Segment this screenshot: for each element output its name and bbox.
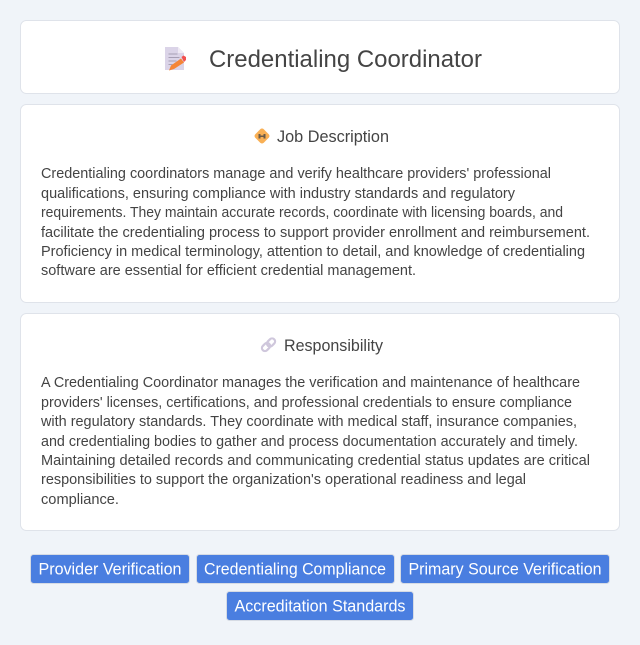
heading: responsibility: Responsibility — [284, 337, 384, 355]
text block: responsibility: compliance. — [41, 492, 119, 508]
panel: job description — [20, 104, 620, 302]
title: Credentialing Coordinator — [209, 46, 482, 73]
text block: job description: facilitate the credentialing process to support provider enrollment and reimbursement. — [41, 225, 590, 241]
text block: job description: requirements. They maintain accurate records, coordinate with licensing boards, and — [41, 205, 563, 221]
text block: responsibility: providers' licenses, certifications, and professional credentials to ensure compliance — [41, 395, 572, 411]
icon: orange diamond — [254, 128, 270, 144]
tag: primary source verification: Primary Source Verification — [408, 560, 602, 578]
tag: credentialing compliance — [196, 554, 394, 584]
text block: job description: software are essential for efficient credential management. — [41, 263, 416, 279]
text block: job description — [41, 166, 590, 279]
text block: responsibility: with regulatory standards. They coordinate with medical staff, insurance companies, — [40, 414, 577, 430]
panel: responsibility — [20, 314, 620, 530]
tag: provider verification — [30, 554, 190, 584]
text block: job description: qualifications, ensuring compliance with industry standards and regulatory — [41, 186, 516, 202]
panel: title card — [20, 20, 620, 94]
text block: job description: Proficiency in medical terminology, attention to detail, and knowledge of credentialing — [41, 244, 585, 260]
tag: provider verification: Provider Verification — [38, 560, 182, 578]
icon: chain link — [261, 337, 276, 352]
tag: credentialing compliance: Credentialing Compliance — [204, 560, 386, 578]
text block: responsibility: Maintaining detailed records and communicating credential status updates are critical — [41, 453, 590, 469]
text block: responsibility: and credentialing bodies to gather and process documentation accurately and timely. — [41, 434, 578, 450]
text block: job description: Credentialing coordinators manage and verify healthcare providers' professional — [41, 166, 551, 182]
tag: accreditation standards — [226, 592, 414, 620]
heading: job description: Job Description — [277, 128, 389, 146]
text block: responsibility — [40, 375, 590, 508]
text block: responsibility: responsibilities to support the organization's operational readiness and legal — [41, 472, 526, 488]
icon: document with pencil — [165, 47, 186, 70]
tag: primary source verification — [400, 554, 610, 584]
text block: responsibility: A Credentialing Coordinator manages the verification and maintenance of healthcare — [41, 375, 580, 391]
tag: accreditation standards: Accreditation Standards — [234, 598, 406, 616]
